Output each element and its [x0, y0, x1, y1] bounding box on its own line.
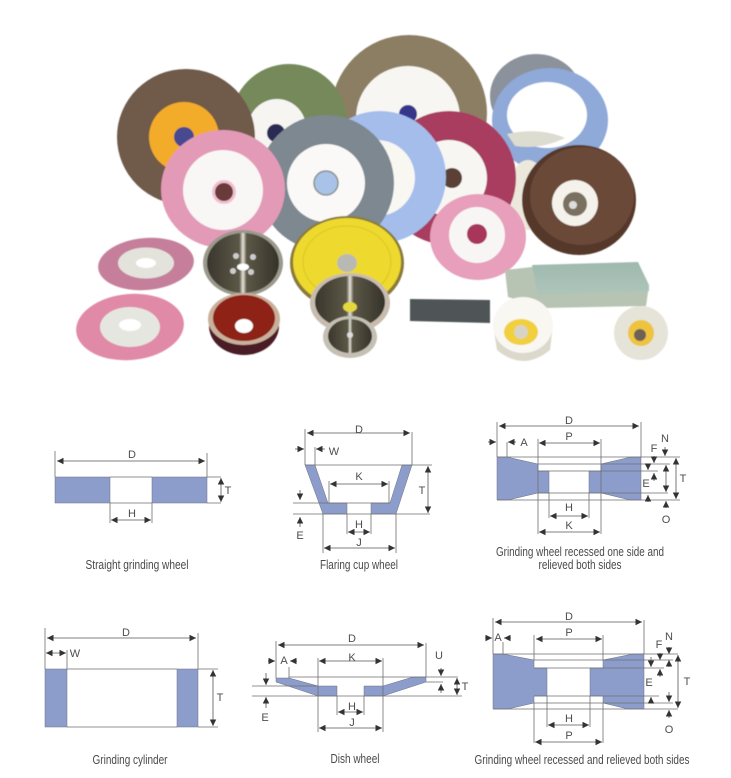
green wheel	[231, 64, 347, 180]
yellow wheel	[290, 216, 404, 310]
small metal wheel	[323, 316, 377, 358]
wheel cross-section	[493, 654, 644, 709]
diagram: recessed and relieved both sides	[474, 611, 691, 767]
caption	[496, 545, 664, 572]
dimension labels	[128, 449, 232, 520]
dimension lines	[55, 451, 221, 523]
dimension labels: U	[435, 650, 443, 662]
blue cylinder ring	[490, 54, 608, 172]
product photo: assorted grinding wheels	[73, 35, 668, 365]
dimension labels: D	[128, 449, 136, 461]
pink wheel	[161, 130, 285, 248]
caption: Dish wheel	[330, 752, 380, 766]
maroon wheel	[382, 111, 516, 245]
diagram: straight grinding wheel	[55, 449, 232, 572]
dimension labels: D	[565, 415, 573, 427]
diagram: flaring cup wheel	[293, 424, 432, 572]
dimension labels: T	[217, 692, 224, 704]
dimension labels: W	[70, 648, 81, 660]
dimension labels: K	[348, 652, 356, 664]
green stone block	[505, 262, 649, 308]
caption: Grinding wheel recessed one side and	[496, 545, 664, 559]
dimension labels: O	[662, 514, 671, 526]
caption: Straight grinding wheel	[86, 558, 188, 572]
dimension labels	[520, 415, 687, 532]
dimension labels: N	[661, 433, 669, 445]
dark sharpening stone	[410, 299, 490, 323]
dimension labels: H	[128, 508, 136, 520]
diagram: dish wheel	[252, 633, 469, 766]
dimension labels: H	[565, 502, 573, 514]
small white wheel with yellow centre	[614, 306, 668, 360]
dimension labels: A	[494, 632, 502, 644]
dimension labels	[296, 424, 426, 549]
dimension labels: P	[565, 730, 573, 742]
red wheel	[208, 293, 280, 355]
dimension labels: T	[419, 485, 426, 497]
dimension labels: K	[355, 471, 363, 483]
dark brown wheel	[522, 145, 636, 255]
metal wheel with four holes	[203, 230, 283, 296]
grey wheel	[258, 115, 394, 251]
brown wheel with orange centre	[117, 69, 255, 205]
dimension labels: P	[565, 627, 573, 639]
pink disc lower	[73, 289, 187, 365]
cylinder cross-section	[45, 669, 198, 727]
dimension labels: D	[565, 611, 573, 623]
dimension labels	[70, 627, 224, 704]
dimension labels: H	[355, 519, 363, 531]
wheel cross-section	[305, 465, 412, 514]
dimension labels	[494, 611, 691, 742]
dimension lines	[485, 618, 678, 743]
dimension labels: E	[296, 530, 304, 542]
dimension labels: H	[348, 701, 356, 713]
dimension labels: E	[645, 677, 653, 689]
dimension labels: E	[261, 712, 269, 724]
light blue wheel	[314, 111, 446, 243]
dimension labels: A	[280, 655, 288, 667]
dimension labels: D	[348, 633, 356, 645]
dimension labels: P	[565, 431, 573, 443]
dimension labels: K	[565, 520, 573, 532]
dimension labels: J	[349, 717, 355, 729]
wheel cross-section	[497, 457, 641, 500]
dimension labels: D	[355, 424, 363, 436]
dimension lines	[293, 429, 432, 553]
metal cup wheel	[310, 273, 390, 333]
dimension labels: T	[680, 473, 687, 485]
dimension labels: D	[122, 627, 130, 639]
dimension labels: A	[520, 437, 528, 449]
wheel cross-section	[55, 477, 207, 503]
dimension labels: F	[651, 443, 658, 455]
khaki wheel	[331, 35, 487, 191]
cream wheel behind	[508, 160, 548, 230]
caption: Flaring cup wheel	[320, 558, 398, 572]
dimension labels: T	[225, 485, 232, 497]
caption: Grinding cylinder	[92, 753, 168, 767]
pink disc upper	[96, 234, 196, 294]
diagram: grinding cylinder	[45, 627, 224, 767]
dimension lines	[252, 641, 462, 732]
diagram: recessed one side, relieved both sides	[488, 415, 687, 572]
dimension labels: O	[665, 724, 674, 736]
dimension labels	[261, 633, 469, 729]
dimension labels: F	[656, 639, 663, 651]
dimension lines	[45, 628, 218, 727]
dimension labels: N	[665, 631, 673, 643]
dimension labels: H	[565, 713, 573, 725]
caption: relieved both sides	[538, 558, 622, 572]
wheel cross-section	[276, 677, 426, 696]
dimension labels: T	[462, 681, 469, 693]
small pink wheel	[430, 194, 526, 280]
white cup with yellow centre	[493, 297, 553, 361]
dimension labels: J	[356, 537, 362, 549]
dimension labels: E	[642, 478, 650, 490]
dimension labels: T	[684, 676, 691, 688]
dimension lines	[488, 422, 680, 534]
dimension labels: W	[329, 446, 340, 458]
